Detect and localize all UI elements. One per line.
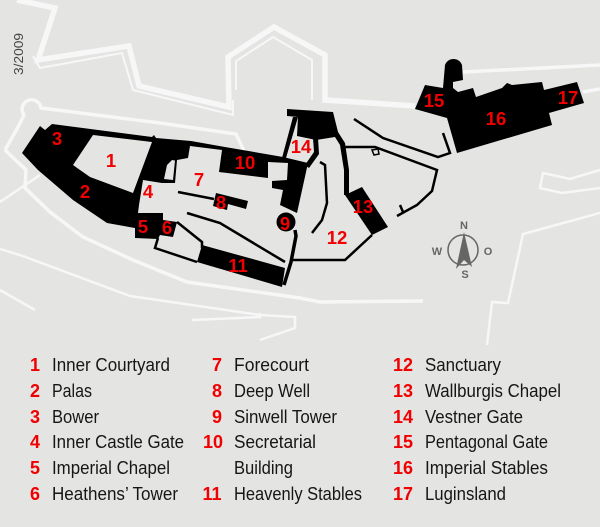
legend column 1: 1 — [30, 355, 40, 375]
wall: Vestner Gate left side — [282, 117, 298, 158]
legend column 1: Inner Courtyard — [52, 355, 170, 375]
legend column 1: Bower — [52, 407, 99, 427]
legend column 3 — [393, 355, 561, 504]
legend column 3: 13 — [393, 381, 413, 401]
map: thin walls — [155, 119, 450, 285]
map numbers: 9 — [280, 213, 290, 234]
legend column 3: Pentagonal Gate — [425, 432, 548, 452]
legend column 1: 2 — [30, 381, 40, 401]
legend column 2: Deep Well — [234, 381, 310, 401]
building: Heavenly Stables — [197, 245, 285, 287]
legend column 1: Heathens’ Tower — [52, 484, 178, 504]
map numbers — [52, 87, 578, 276]
legend column 3: Vestner Gate — [425, 407, 523, 427]
map numbers: 17 — [558, 87, 578, 108]
map numbers: 3 — [52, 128, 62, 149]
legend column 2: 7 — [212, 355, 222, 375]
building: Pentagonal Gate, Imperial Stables and Luginsland — [415, 59, 584, 153]
map numbers: 12 — [327, 227, 347, 248]
building: Deep Well block — [213, 193, 248, 210]
legend column 2: 10 — [203, 432, 223, 452]
legend column 3: 17 — [393, 484, 413, 504]
map: inner castle buildings — [22, 59, 584, 287]
map numbers: 16 — [486, 108, 506, 129]
legend column 3: Imperial Stables — [425, 458, 548, 478]
map numbers: 14 — [291, 136, 312, 157]
legend column 2: 9 — [212, 407, 222, 427]
icon: compass: W — [432, 246, 443, 258]
legend column 1: Imperial Chapel — [52, 458, 170, 478]
legend column 3: 16 — [393, 458, 413, 478]
map numbers: 8 — [216, 192, 226, 213]
legend column 2: Building — [234, 458, 293, 478]
map numbers: 15 — [424, 90, 444, 111]
legend column 3: Wallburgis Chapel — [425, 381, 561, 401]
map numbers: 13 — [353, 196, 373, 217]
legend column 1: 3 — [30, 407, 40, 427]
legend column 2: 8 — [212, 381, 222, 401]
legend column 3: Sanctuary — [425, 355, 501, 375]
legend column 3: 12 — [393, 355, 413, 375]
map numbers: 11 — [228, 255, 248, 276]
legend column 2 — [202, 355, 362, 504]
legend column 2: 11 — [202, 484, 222, 504]
legend column 2: Forecourt — [234, 355, 309, 375]
legend column 3: Luginsland — [425, 484, 506, 504]
legend column 1: Inner Castle Gate — [52, 432, 184, 452]
map numbers: 6 — [162, 217, 172, 238]
legend column 3: 15 — [393, 432, 413, 452]
map numbers: 1 — [106, 150, 116, 171]
outer fortification white lines — [0, 0, 600, 345]
map numbers: 7 — [194, 169, 204, 190]
legend column 1: 4 — [30, 432, 40, 452]
legend column 1: 5 — [30, 458, 40, 478]
map numbers: 2 — [80, 181, 90, 202]
legend column 2: Sinwell Tower — [234, 407, 337, 427]
icon: compass: S — [461, 269, 469, 281]
map numbers: 5 — [138, 216, 148, 237]
building: Bower, Palas, Inner Castle Gate, Secretarial Building and Imperial Chapel — [22, 124, 308, 239]
date code: 3/2009 — [11, 33, 26, 75]
icon: compass: N — [460, 220, 468, 232]
legend — [30, 355, 561, 504]
legend column 1: 6 — [30, 484, 40, 504]
map numbers: 4 — [143, 181, 154, 202]
building: Wallburgis Chapel — [345, 187, 388, 235]
legend column 1: Palas — [52, 381, 92, 401]
legend column 2: Heavenly Stables — [234, 484, 362, 504]
map numbers: 10 — [235, 152, 255, 173]
building: Vestner Gate — [287, 109, 349, 195]
wall: Vestner Gate right side — [305, 138, 319, 168]
legend column 2: Secretarial — [234, 432, 316, 452]
icon: compass: O — [484, 246, 493, 258]
legend column 3: 14 — [393, 407, 413, 427]
legend column 1 — [30, 355, 184, 504]
icon: compass — [432, 220, 493, 281]
building: Sinwell Tower — [276, 212, 296, 232]
